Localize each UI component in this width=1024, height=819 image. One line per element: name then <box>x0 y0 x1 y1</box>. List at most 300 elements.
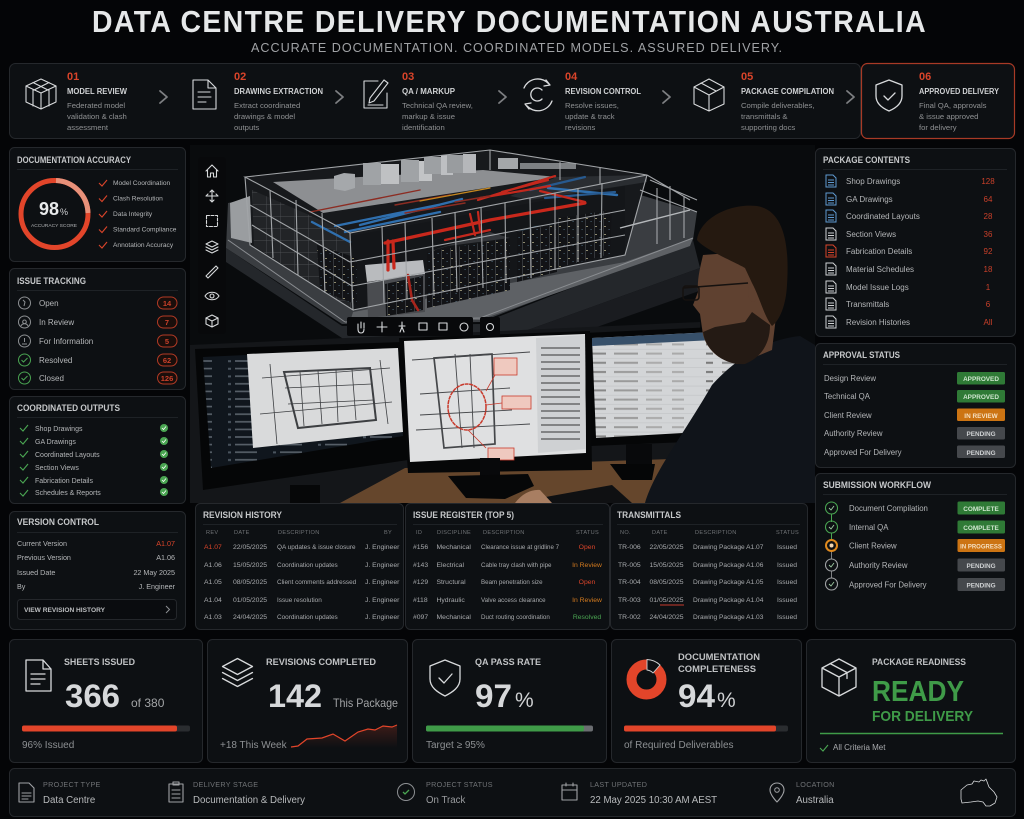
icon: home <box>206 165 218 177</box>
rows: Electrical <box>436 562 465 569</box>
step 06: approved delivery <box>862 64 1014 138</box>
cooling units on roof <box>334 154 576 191</box>
approval rows: APPROVED <box>963 376 999 383</box>
step 06: approved delivery: 06 <box>919 71 931 83</box>
KPI card: package readiness <box>806 640 1016 762</box>
rows: 22/05/2025 <box>233 544 267 551</box>
rows: Open <box>579 579 596 586</box>
rows: TR-003 <box>618 597 641 604</box>
approval rows: Technical QA <box>824 392 871 401</box>
rows: Drawing Package A1.04 <box>693 597 764 604</box>
rows: Valve access clearance <box>481 597 546 604</box>
icon: settings <box>486 324 494 330</box>
step 03: QA markup: Technical QA review, <box>402 101 473 110</box>
step 02: drawing extraction: Extract coordinated <box>234 101 300 110</box>
contents rows: 1 <box>986 283 991 292</box>
step 01: model review: 01 <box>67 71 79 83</box>
workflow rows: PENDING <box>966 563 996 570</box>
table: revision history <box>196 504 404 630</box>
accuracy ring gauge <box>21 180 88 248</box>
delivery stage: Documentation & Delivery <box>193 795 305 806</box>
step 01: model review: MODEL REVIEW <box>67 87 127 96</box>
rows: 15/05/2025 <box>233 562 267 569</box>
contents rows: 36 <box>984 230 993 239</box>
heading: DOCUMENTATION ACCURACY <box>17 155 131 165</box>
accuracy ring gauge: ACCURACY SCORE <box>31 223 78 229</box>
last updated <box>562 780 717 806</box>
approval rows: PENDING <box>966 431 996 438</box>
workflow rows <box>849 502 1005 591</box>
workflow rows: PENDING <box>966 582 996 590</box>
rows: Hydraulic <box>436 597 465 604</box>
rows: #156 <box>413 544 428 551</box>
step 06: approved delivery: & issue approved <box>919 112 978 121</box>
column headers: STATUS <box>776 530 799 536</box>
column headers: REV <box>206 530 218 536</box>
workflow rows: Authority Review <box>849 561 908 570</box>
rows: Client comments addressed <box>277 579 357 586</box>
panel: issue tracking <box>10 268 186 390</box>
step 02: drawing extraction: DRAWING EXTRACTION <box>234 87 323 96</box>
rows: In Review <box>572 562 602 569</box>
KPI card: sheets issued <box>10 640 202 762</box>
version rows: By <box>17 582 26 591</box>
document icons <box>826 175 836 328</box>
workflow rows: Client Review <box>849 542 897 550</box>
rows: Cable tray clash with pipe <box>481 562 552 569</box>
icon: wireframe cube <box>26 79 56 109</box>
panel: submission workflow <box>816 474 1016 630</box>
rows: 24/04/2025 <box>650 614 684 621</box>
icon: document <box>26 660 51 691</box>
arrow <box>663 91 670 103</box>
contents rows: Fabrication Details <box>846 247 912 256</box>
icon: shield check <box>876 80 902 111</box>
heading: VERSION CONTROL <box>17 517 100 527</box>
heading: TRANSMITTALS <box>617 510 681 520</box>
KPI card: documentation completeness: DOCUMENTATION <box>678 652 760 662</box>
KPI card: QA pass rate: 97 <box>475 678 512 714</box>
step 06: approved delivery: for delivery <box>919 123 957 132</box>
status rows: 7 <box>165 318 169 327</box>
approval rows: IN REVIEW <box>964 413 999 420</box>
KPI card: package readiness: FOR DELIVERY <box>872 708 973 725</box>
status rows: Resolved <box>39 356 72 365</box>
heading: SUBMISSION WORKFLOW <box>823 480 932 490</box>
rows: Mechanical <box>436 614 471 621</box>
step 04: revision control: Resolve issues, <box>565 101 619 110</box>
arrow <box>160 91 167 103</box>
step 03: QA markup: 03 <box>402 71 414 83</box>
icon: revision cycle <box>524 79 552 111</box>
rows: Drawing Package A1.03 <box>693 614 764 621</box>
KPI card: package readiness: PACKAGE READINESS <box>872 657 966 667</box>
rows: Open <box>579 544 596 551</box>
project status: PROJECT STATUS <box>426 780 493 789</box>
KPI card: sheets issued: 96% Issued <box>22 740 74 751</box>
KPI card: sheets issued: of 380 <box>131 696 165 710</box>
base edge railing <box>228 238 693 322</box>
rows: Issued <box>777 562 797 569</box>
accuracy checklist: Standard Compliance <box>113 226 177 234</box>
step 03: QA markup: QA / MARKUP <box>402 87 456 96</box>
KPI card: documentation completeness: 94 <box>678 678 715 714</box>
step 05: package compilation: supporting docs <box>741 123 795 132</box>
panel: package contents <box>816 148 1016 336</box>
contents rows: Material Schedules <box>846 265 914 274</box>
KPI card: documentation completeness: % <box>717 689 736 712</box>
rows: A1.05 <box>204 579 222 586</box>
donut chart <box>632 660 662 694</box>
version rows: 22 May 2025 <box>133 568 175 577</box>
rows: QA updates & issue closure <box>277 544 356 551</box>
rows: #097 <box>413 614 428 621</box>
step 04: revision control: REVISION CONTROL <box>565 87 641 96</box>
progress bar <box>426 726 593 732</box>
roof slab <box>273 170 557 213</box>
rows: 01/05/2025 <box>650 597 684 604</box>
rows: Issue resolution <box>277 597 322 604</box>
arrow <box>499 91 506 103</box>
step 05: package compilation <box>694 71 834 132</box>
rows: Coordination updates <box>277 614 338 621</box>
workflow timeline <box>826 502 838 590</box>
output checklist <box>20 424 168 497</box>
KPI card: revisions completed: REVISIONS COMPLETED <box>266 657 377 667</box>
contents rows: Model Issue Logs <box>846 283 909 292</box>
button: view revision history: VIEW REVISION HISTORY <box>24 607 106 614</box>
workflow rows: COMPLETE <box>963 506 999 513</box>
monitor: centre markup <box>399 331 592 499</box>
column headers <box>416 530 599 536</box>
column headers: DESCRIPTION <box>695 530 737 536</box>
step 01: model review: Federated model <box>67 101 125 110</box>
rows: #143 <box>413 562 428 569</box>
step 04: revision control: revisions <box>565 123 595 132</box>
contents rows: GA Drawings <box>846 195 893 204</box>
contents rows: 6 <box>986 300 991 309</box>
panel: documentation accuracy <box>10 148 186 262</box>
step 04: revision control: update & track <box>565 112 615 121</box>
version rows: Current Version <box>17 539 67 548</box>
location: LOCATION <box>796 780 835 789</box>
contents rows: 64 <box>984 195 993 204</box>
KPI card: QA pass rate: % <box>515 689 534 712</box>
rows: Coordination updates <box>277 562 338 569</box>
approval rows <box>824 372 1005 458</box>
accuracy ring gauge: 98 <box>39 199 59 219</box>
rows: J. Engineer <box>365 579 400 586</box>
KPI card: documentation completeness: of Required Deliverables <box>624 740 734 751</box>
column headers <box>620 530 799 536</box>
output checklist: GA Drawings <box>35 439 76 446</box>
status rows: Open <box>39 299 59 308</box>
project type: PROJECT TYPE <box>43 780 101 789</box>
progress bar <box>624 726 788 732</box>
icon: eye <box>205 292 219 300</box>
step 01: model review <box>26 71 127 132</box>
rows: #118 <box>413 597 428 604</box>
status rows: For Information <box>39 337 93 346</box>
panel: approval status <box>816 344 1016 468</box>
KPI card: documentation completeness: COMPLETENESS <box>678 664 756 674</box>
rows: J. Engineer <box>365 562 400 569</box>
table: issue register <box>406 504 610 630</box>
contents rows: 18 <box>984 265 993 274</box>
status rows: 62 <box>163 356 171 365</box>
progress bar <box>22 726 190 732</box>
approval rows: Approved For Delivery <box>824 448 902 457</box>
status rows: 126 <box>161 374 173 383</box>
column headers: DATE <box>652 530 668 536</box>
rows: A1.03 <box>204 614 222 621</box>
desk <box>340 458 700 503</box>
KPI card: revisions completed: 142 <box>268 678 322 714</box>
arrow <box>847 91 854 103</box>
icon: layers <box>222 658 252 686</box>
wall behind monitors <box>190 322 700 503</box>
panel: coordinated outputs <box>10 396 186 504</box>
icon: layers <box>206 241 218 253</box>
step 03: QA markup <box>364 71 473 132</box>
server racks <box>317 210 612 308</box>
output checklist: Section Views <box>35 465 79 472</box>
icon: capture <box>439 323 447 330</box>
location <box>770 780 835 806</box>
KPI card: revisions completed: +18 This Week <box>220 740 288 751</box>
step 01: model review: validation & clash <box>67 112 127 121</box>
KPI card: sheets issued: SHEETS ISSUED <box>64 657 135 667</box>
step 01: model review: assessment <box>67 123 109 132</box>
version rows: Issued Date <box>17 568 55 577</box>
step 02: drawing extraction <box>193 71 323 132</box>
approval rows: APPROVED <box>963 394 999 401</box>
rows: 08/05/2025 <box>233 579 267 586</box>
KPI card: package readiness: READY <box>872 676 964 708</box>
rows: 01/05/2025 <box>233 597 267 604</box>
column headers <box>206 530 392 536</box>
rows: Structural <box>436 579 466 586</box>
3D model of data centre <box>198 150 702 340</box>
output checklist: Shop Drawings <box>35 426 83 433</box>
workflow rows: Internal QA <box>849 523 889 532</box>
status rows: 14 <box>163 299 172 308</box>
output checklist: Fabrication Details <box>35 478 93 485</box>
accuracy checklist <box>99 180 177 249</box>
icon: compass <box>460 323 468 331</box>
status rows: In Review <box>39 318 74 327</box>
icon: section box <box>206 216 218 226</box>
rows: A1.06 <box>204 562 222 569</box>
column headers: DESCRIPTION <box>483 530 525 536</box>
project status: On Track <box>426 795 465 806</box>
contents rows: Coordinated Layouts <box>846 212 920 221</box>
column headers: BY <box>384 530 392 536</box>
sparkline <box>291 725 397 748</box>
version rows: A1.06 <box>156 553 175 562</box>
project status <box>398 780 493 806</box>
step 06: approved delivery: Final QA, approvals <box>919 101 987 110</box>
rows: In Review <box>572 597 602 604</box>
table: transmittals <box>610 504 808 630</box>
rows: 15/05/2025 <box>650 562 684 569</box>
step 06: approved delivery: APPROVED DELIVERY <box>919 87 1000 96</box>
rows: Clearance issue at gridline 7 <box>481 544 560 551</box>
contents rows: 28 <box>984 212 993 221</box>
icon: walk <box>399 322 405 332</box>
rows: Drawing Package A1.06 <box>693 562 764 569</box>
rows: A1.04 <box>204 597 222 604</box>
toolbar: bottom view tools <box>347 317 500 336</box>
step 05: package compilation: PACKAGE COMPILATION <box>741 87 834 96</box>
monitor: left floor plan <box>195 342 408 503</box>
rows: Issued <box>777 579 797 586</box>
step 05: package compilation: transmittals & <box>741 112 788 121</box>
icon: pen on sheet <box>364 80 388 108</box>
rows <box>618 544 797 621</box>
contents rows: Section Views <box>846 230 896 239</box>
rows: TR-002 <box>618 614 641 621</box>
rows: Beam penetration size <box>481 579 543 586</box>
heading: APPROVAL STATUS <box>823 350 900 360</box>
KPI card: revisions completed: This Package <box>333 696 398 710</box>
project type: Data Centre <box>43 795 95 806</box>
approval rows: Design Review <box>824 374 876 383</box>
rows: Mechanical <box>436 544 471 551</box>
icon: orbit <box>206 190 218 202</box>
icon: cube <box>206 315 218 327</box>
icon: camera <box>419 323 427 330</box>
accuracy checklist: Clash Resolution <box>113 196 163 202</box>
approval rows: Client Review <box>824 411 872 420</box>
column headers: DISCIPLINE <box>437 530 471 536</box>
subtitle: ACCURATE DOCUMENTATION. COORDINATED MODELS. ASSURED DELIVERY. <box>251 41 782 55</box>
KPI card: sheets issued: 366 <box>65 678 120 714</box>
last updated: 22 May 2025 10:30 AM AEST <box>590 795 717 806</box>
title: DATA CENTRE DELIVERY DOCUMENTATION AUSTRALIA <box>92 5 927 39</box>
output checklist: Coordinated Layouts <box>35 452 100 459</box>
step 05: package compilation: Compile deliverables, <box>741 101 814 110</box>
contents rows: All <box>984 318 993 327</box>
panel: version control <box>10 512 186 630</box>
contents rows: 128 <box>981 177 995 186</box>
rows: 08/05/2025 <box>650 579 684 586</box>
rows: Resolved <box>573 614 601 621</box>
approval rows: PENDING <box>966 450 996 457</box>
KPI card: revisions completed <box>208 640 408 762</box>
heading: ISSUE TRACKING <box>17 276 86 286</box>
approval rows: Authority Review <box>824 429 883 438</box>
accuracy checklist: Annotation Accuracy <box>113 242 174 249</box>
rows: J. Engineer <box>365 614 400 621</box>
service room <box>365 260 425 318</box>
icon: box <box>822 659 856 696</box>
contents rows: 92 <box>984 247 993 256</box>
version rows <box>17 539 176 591</box>
criteria note: All Criteria Met <box>833 743 886 752</box>
accuracy checklist: Model Coordination <box>113 180 171 187</box>
heading: PACKAGE CONTENTS <box>823 155 910 165</box>
rows: Issued <box>777 544 797 551</box>
rows: TR-006 <box>618 544 641 551</box>
status rows: 5 <box>165 337 169 346</box>
accuracy checklist: Data Integrity <box>113 211 153 218</box>
KPI card: documentation completeness <box>612 640 802 762</box>
rows: J. Engineer <box>365 544 400 551</box>
icon: move <box>377 322 387 332</box>
version rows: A1.07 <box>156 539 175 548</box>
KPI card: QA pass rate <box>412 640 606 762</box>
workflow rows: Approved For Delivery <box>849 580 927 590</box>
workflow rows: Document Compilation <box>849 504 928 513</box>
output checklist: Schedules & Reports <box>35 490 101 497</box>
location: Australia <box>796 795 834 806</box>
icon: shield check <box>430 660 460 696</box>
engineer <box>645 206 815 503</box>
workflow rows: IN PROGRESS <box>960 544 1002 550</box>
contents rows: Shop Drawings <box>846 177 900 186</box>
rows: J. Engineer <box>365 597 400 604</box>
arrow <box>336 91 343 103</box>
rows: Issued <box>777 597 797 604</box>
column headers: DATE <box>234 530 250 536</box>
delivery stage <box>169 780 305 806</box>
contents rows <box>846 177 995 327</box>
step 03: QA markup: markup & issue <box>402 112 455 121</box>
red revision cloud and callouts <box>448 358 531 460</box>
status rows <box>18 297 177 384</box>
column headers: STATUS <box>576 530 599 536</box>
column headers: DESCRIPTION <box>278 530 320 536</box>
rows: 24/04/2025 <box>233 614 267 621</box>
step 03: QA markup: identification <box>402 123 445 132</box>
step 02: drawing extraction: outputs <box>234 123 259 132</box>
column headers: ID <box>416 530 422 536</box>
footer status bar <box>10 768 1016 816</box>
delivery stage: DELIVERY STAGE <box>193 780 258 789</box>
rows: Issued <box>777 614 797 621</box>
project type <box>19 780 101 806</box>
icon: ruler <box>206 266 218 278</box>
step 04: revision control <box>524 71 641 132</box>
rows: Drawing Package A1.05 <box>693 579 764 586</box>
icon: document <box>193 80 216 109</box>
workflow rows: COMPLETE <box>963 525 999 532</box>
keyboard and hand <box>515 485 632 503</box>
rows: #129 <box>413 579 428 586</box>
icon: Australia outline <box>961 779 997 806</box>
status rows: Closed <box>39 374 64 383</box>
rows: A1.07 <box>204 544 222 551</box>
step 02: drawing extraction: drawings & model <box>234 112 295 121</box>
rows <box>413 544 602 621</box>
last updated: LAST UPDATED <box>590 780 647 789</box>
step 02: drawing extraction: 02 <box>234 71 246 83</box>
contents rows: Transmittals <box>846 300 889 309</box>
column headers: NO. <box>620 530 631 536</box>
heading: ISSUE REGISTER (TOP 5) <box>413 510 514 520</box>
rows: TR-004 <box>618 579 641 586</box>
rows: 22/05/2025 <box>650 544 684 551</box>
icon: hand <box>358 322 364 333</box>
step 05: package compilation: 05 <box>741 71 753 83</box>
rows <box>204 544 400 621</box>
monitor: right register <box>584 326 737 480</box>
accuracy ring gauge: % <box>60 207 68 217</box>
toolbar: left view tools <box>198 157 226 334</box>
step 04: revision control: 04 <box>565 71 578 83</box>
KPI card: QA pass rate: QA PASS RATE <box>475 657 541 667</box>
